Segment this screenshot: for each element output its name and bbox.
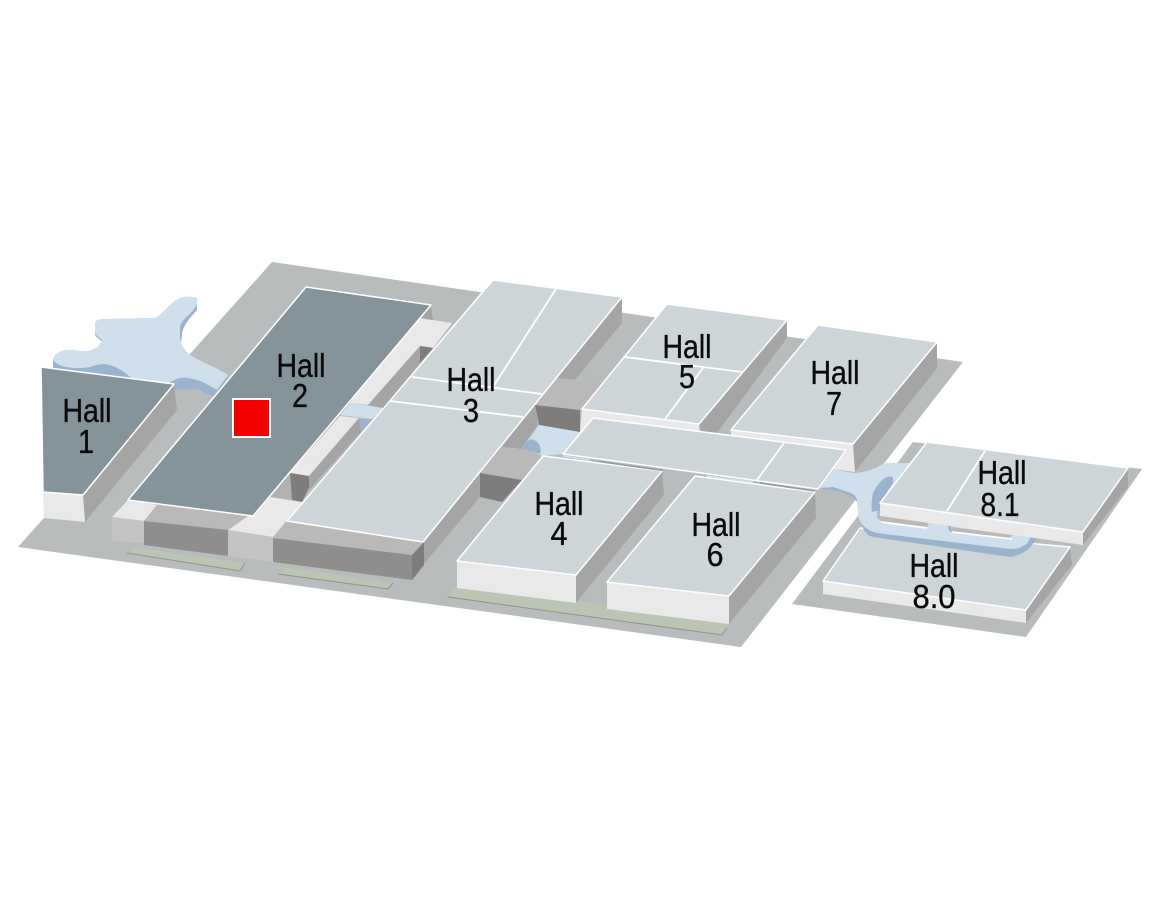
- bridge water shadow: [359, 419, 372, 432]
- lower shadow band: [862, 525, 1037, 557]
- green strips: [127, 548, 729, 635]
- hall 5 roof: [582, 304, 787, 424]
- connector between hall 3 and hall 4: [480, 447, 543, 480]
- label: hall 7: [810, 354, 860, 422]
- recess front: [144, 521, 228, 556]
- hall 6 side: [729, 492, 816, 624]
- lower strip side: [309, 418, 361, 490]
- label: hall 6: 6: [706, 536, 724, 573]
- label: hall 2: Hall: [276, 347, 326, 384]
- label: hall 2: 2: [292, 377, 308, 414]
- hall 3: [273, 297, 622, 580]
- water tick: [948, 525, 952, 532]
- walkway lower strip: [290, 416, 359, 476]
- hall 8.1 front: [880, 503, 1083, 545]
- connector dark face lower: [480, 473, 522, 502]
- label: hall 4: 4: [550, 515, 568, 552]
- hall 3 base front: [273, 538, 412, 580]
- water surface: [820, 463, 1030, 549]
- ground: main site: [18, 262, 963, 647]
- red location marker: [233, 399, 270, 437]
- concourse back strip: [563, 409, 850, 470]
- label: hall 6: [692, 506, 740, 573]
- walkway upper strip: [350, 318, 452, 405]
- hall 3 side: [423, 297, 622, 565]
- hall 4 roof: [457, 456, 662, 575]
- ground: east site: [792, 442, 1142, 637]
- thin gutter under concourse: [563, 456, 815, 491]
- hall 7 front: [731, 430, 855, 472]
- south strip: [228, 497, 302, 537]
- hall 6: [607, 476, 816, 624]
- hall 1: [41, 367, 177, 522]
- label: hall 5: [662, 328, 712, 395]
- hall 3 base corner: [412, 542, 424, 580]
- label: hall 4: Hall: [534, 485, 584, 522]
- lower strip end: [290, 473, 309, 502]
- hall 2 walkway: [112, 318, 452, 562]
- hall 3 base top: [273, 522, 425, 555]
- bridge water: [340, 403, 383, 419]
- hall 8.0 front: [823, 581, 1026, 623]
- label: hall 5: Hall: [662, 328, 712, 365]
- west strip front: [112, 517, 144, 543]
- hall 1 side: [83, 384, 177, 522]
- water shadow oval: [872, 476, 893, 512]
- passage water shadow: [522, 439, 541, 454]
- hall 7 roof: [731, 325, 937, 444]
- hall 5 side: [699, 320, 787, 433]
- hall 8.1 roof: [880, 442, 1128, 532]
- upper shadow band: [820, 484, 860, 503]
- label: hall 8.1: [978, 454, 1026, 523]
- hall 8.0 side: [1026, 547, 1072, 623]
- yard ground: [270, 473, 292, 500]
- label: hall 1: [62, 392, 112, 460]
- hall 5: [563, 304, 850, 470]
- label: hall 8.0: 8.0: [912, 578, 956, 615]
- hall 7: [731, 325, 937, 472]
- connector dark face: [535, 405, 580, 432]
- label: hall 8.0: Hall: [910, 547, 958, 584]
- label: hall 8.1: Hall: [978, 454, 1026, 491]
- water feature: north-west courtyard: [53, 297, 228, 398]
- label: hall 6: Hall: [692, 506, 740, 543]
- hall 4: [457, 456, 664, 603]
- label: hall 3: 3: [463, 392, 479, 429]
- south strip front: [228, 530, 273, 562]
- label: hall 5: 5: [679, 358, 695, 395]
- label: hall 7: 7: [826, 385, 842, 422]
- hall 2: [128, 287, 433, 516]
- hall 8.1 side: [1083, 468, 1128, 545]
- hall 7 side: [853, 342, 937, 472]
- gap side: [368, 346, 433, 408]
- central concourse roof: [563, 418, 846, 489]
- shadowed pavement under hall 8.1: [877, 513, 929, 527]
- label: hall 2: [276, 347, 326, 414]
- label: hall 3: [446, 361, 496, 429]
- label: hall 3: Hall: [446, 361, 496, 398]
- hall 4 front: [457, 561, 576, 603]
- hall 1 roof: [41, 367, 174, 495]
- west strip: [112, 500, 157, 521]
- hall 8.0: [823, 528, 1072, 623]
- hall 3 roof: [287, 280, 622, 542]
- recess top: [144, 505, 248, 530]
- label: hall 4: [534, 485, 584, 552]
- hall 8.0 roof: [823, 528, 1070, 610]
- hall 4 side: [576, 471, 664, 603]
- hall 6 roof: [607, 476, 815, 596]
- passage water: [522, 425, 580, 456]
- hall 2 roof: [128, 287, 431, 516]
- water walkway east: [820, 463, 1037, 557]
- label: hall 1: Hall: [62, 392, 112, 429]
- hall 1 front: [43, 492, 85, 522]
- hall 6 front: [607, 582, 729, 624]
- label: hall 8.1: 8.1: [980, 486, 1020, 523]
- connector between hall 3 and hall 5: [535, 378, 610, 410]
- label: hall 7: Hall: [810, 354, 860, 391]
- label: hall 8.0: [910, 547, 958, 615]
- hall 2 back side: [420, 305, 433, 320]
- gap dark corner: [420, 346, 433, 363]
- label: hall 1: 1: [78, 423, 94, 460]
- hall 8.1: [880, 442, 1128, 545]
